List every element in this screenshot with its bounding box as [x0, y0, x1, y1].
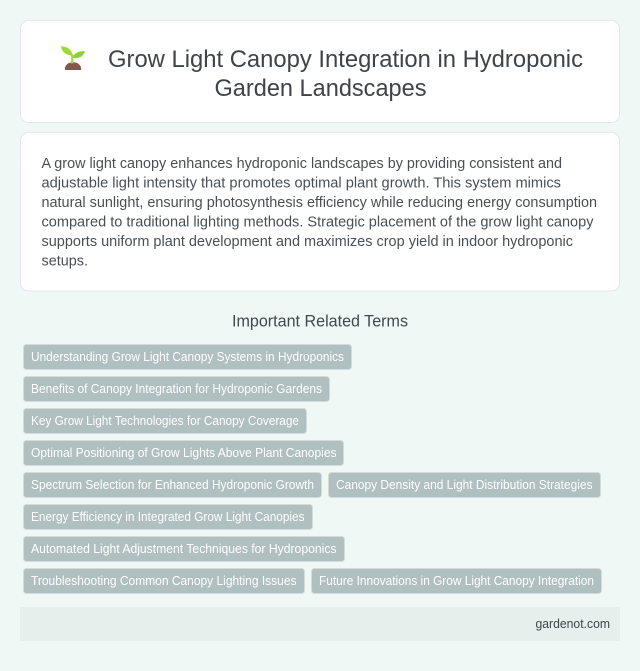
- tag list: related terms: [24, 344, 602, 594]
- tag 10: Future Innovations in Grow Light Canopy Integration: [319, 574, 594, 588]
- footer source text: gardenot.com: [536, 617, 610, 631]
- text block: description: supports uniform plant development and maximizes crop yield in indoor hydroponic: [42, 234, 573, 250]
- text block: description: setups.: [42, 253, 88, 269]
- tag 10: [312, 568, 602, 594]
- tag 2: Benefits of Canopy Integration for Hydroponic Gardens: [31, 382, 322, 396]
- title: [108, 46, 583, 102]
- tag 5: Spectrum Selection for Enhanced Hydroponic Growth: [31, 478, 314, 492]
- icon: seedling: [61, 46, 85, 70]
- heading: related terms: Important Related Terms: [232, 312, 408, 330]
- panel: title card: [20, 20, 620, 122]
- title: Grow Light Canopy Integration in Hydroponic: [108, 46, 583, 73]
- text block: description: [42, 156, 597, 269]
- tag 3: [24, 408, 306, 434]
- panel: description card: [20, 132, 620, 291]
- tag 5: [24, 472, 322, 498]
- tag 9: [24, 568, 304, 594]
- text block: description: compared to traditional lighting methods. Strategic placement of the grow light canopy: [42, 214, 594, 230]
- tag 7: [24, 504, 312, 530]
- tag 4: Optimal Positioning of Grow Lights Above Plant Canopies: [31, 446, 336, 460]
- text block: description: adjustable light intensity that promotes optimal plant growth. This system mimics: [42, 175, 561, 191]
- text block: description: natural sunlight, ensuring photosynthesis efficiency while reducing energy consumption: [42, 195, 597, 211]
- tag 8: [24, 536, 344, 562]
- tag 6: Canopy Density and Light Distribution Strategies: [336, 478, 592, 492]
- tag 3: Key Grow Light Technologies for Canopy Coverage: [31, 414, 299, 428]
- tag 8: Automated Light Adjustment Techniques for Hydroponics: [31, 542, 336, 556]
- tag 1: Understanding Grow Light Canopy Systems in Hydroponics: [31, 350, 344, 364]
- tag 1: [24, 344, 352, 370]
- tag 7: Energy Efficiency in Integrated Grow Light Canopies: [31, 510, 304, 524]
- text block: description: A grow light canopy enhances hydroponic landscapes by providing consistent and: [42, 156, 562, 172]
- tag 2: [24, 376, 330, 402]
- tag 4: [24, 440, 344, 466]
- footer: [20, 607, 620, 641]
- tag 6: [328, 472, 600, 498]
- tag 9: Troubleshooting Common Canopy Lighting Issues: [31, 574, 296, 588]
- title: Garden Landscapes: [214, 75, 426, 102]
